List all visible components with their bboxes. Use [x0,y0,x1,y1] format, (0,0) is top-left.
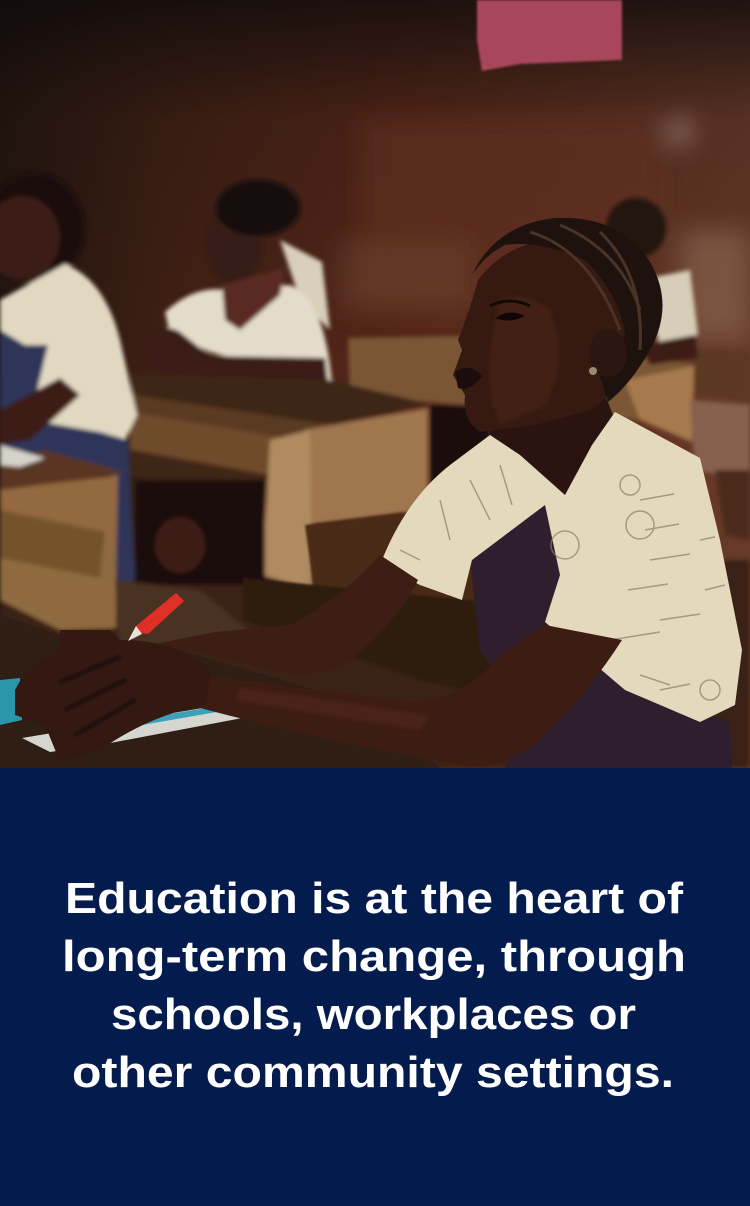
neck [490,395,617,495]
heading: caption text: schools, workplaces or [111,990,636,1039]
pinafore [470,502,732,768]
head [453,240,628,432]
heading: caption text: long-term change, through [62,932,686,981]
foreground bench [242,512,491,689]
photo: classroom with students [0,0,750,768]
hands [15,630,212,762]
eye and lips [495,312,525,321]
background desks and students [0,173,750,768]
heading: caption text [62,874,686,1097]
far arm [158,555,418,658]
floor [0,560,750,768]
icon: red marker [128,593,184,641]
classroom wall [0,0,750,768]
heading: caption text: other community settings. [72,1048,674,1097]
left desk [0,450,125,492]
shirt [380,412,742,722]
centre desk [133,374,430,426]
heading: caption text: Education is at the heart of [65,874,683,923]
centre student [208,214,262,281]
rear right student [606,198,666,258]
near arm [200,625,622,766]
foreground desk [0,615,440,768]
hair [472,218,662,402]
ear [589,329,627,377]
pink poster [477,0,622,71]
panel: navy caption band [0,768,750,1206]
rear right desk [348,336,694,440]
left student [0,173,85,283]
main student [15,218,742,768]
